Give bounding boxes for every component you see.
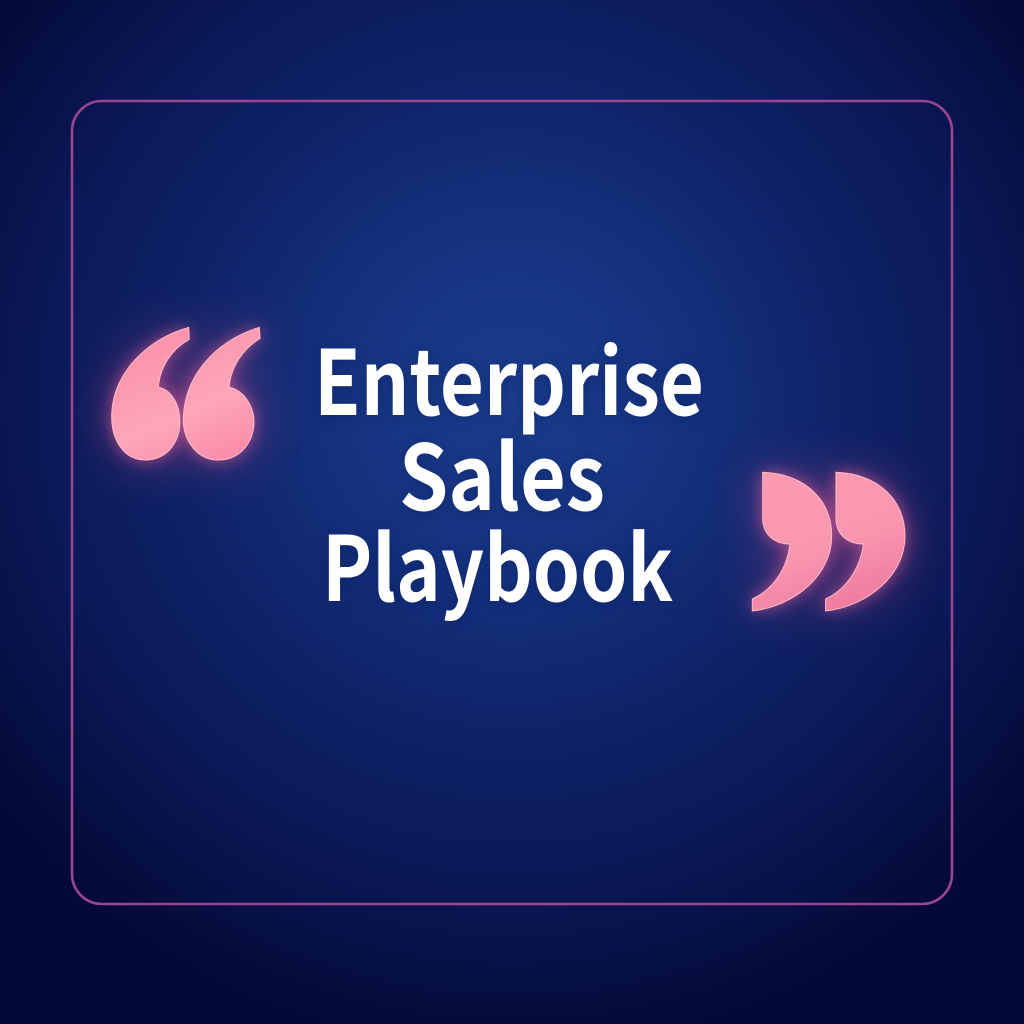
title: Enterprise [314,313,704,443]
title: Playbook [322,499,673,629]
icon: closing quotation mark [752,472,905,611]
icon: opening quotation mark [112,327,260,460]
title: Enterprise [314,311,704,441]
title: Sales [399,408,605,538]
title: Playbook [322,497,673,627]
title [314,311,704,629]
title: Sales [399,406,605,536]
panel: rounded frame [72,101,952,904]
